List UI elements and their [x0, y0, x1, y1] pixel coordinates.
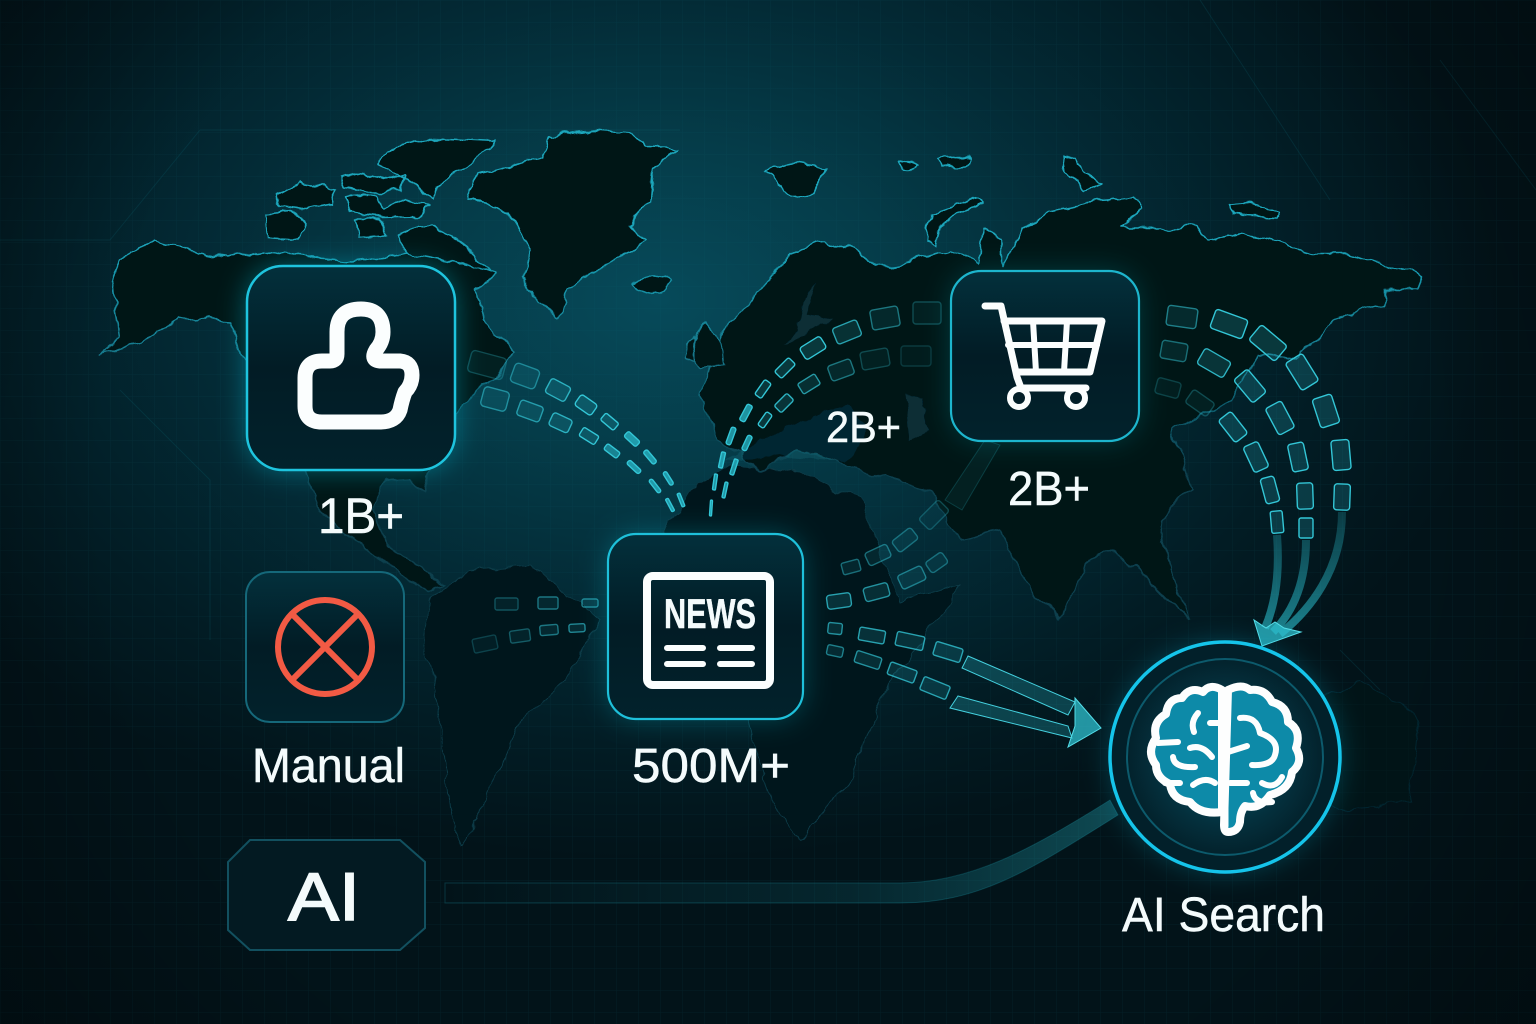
flow: news to South America — [472, 597, 598, 653]
flow: news to social card — [467, 350, 685, 512]
flow: news to Asia — [826, 440, 1000, 610]
icon: newspaper — [647, 576, 770, 685]
land: Baltic and Caspian — [785, 282, 930, 440]
land: Arctic islands — [266, 137, 495, 270]
label: 500M+: 500M+ — [632, 740, 790, 793]
icon: newspaper: NEWS — [664, 590, 756, 637]
land: Greenland — [468, 130, 677, 318]
world map — [100, 130, 1422, 845]
land: Eurasia — [700, 197, 1422, 620]
arrow: cart flow converging into AI search — [1254, 512, 1342, 646]
icon: red cross circle — [278, 600, 372, 694]
panel: AI badge — [228, 840, 425, 950]
land: Africa and Middle East — [640, 465, 960, 840]
label: 1B+: 1B+ — [318, 488, 404, 544]
label: 2B+ under cart: 2B+ — [1008, 463, 1090, 516]
icon: brain — [1151, 686, 1299, 832]
label: AI: AI — [288, 859, 360, 935]
land: Franz Josef and Arctic Russia islands — [898, 155, 1278, 218]
land: Svalbard — [766, 163, 825, 198]
panel: social card — [247, 266, 455, 470]
arrow: news to AI search — [826, 622, 1101, 747]
land: British Isles — [684, 320, 722, 368]
panel: manual card — [246, 572, 404, 722]
arrow: AI to AI search — [445, 800, 1118, 903]
panel: cart card — [951, 271, 1139, 441]
land: South America — [425, 565, 600, 845]
land: Australia — [1300, 680, 1420, 810]
flow: news to cart card — [709, 302, 941, 516]
label: 2B+ over map: 2B+ — [826, 403, 901, 452]
panel: news card — [608, 534, 803, 719]
land: North America — [100, 240, 515, 592]
land: Mediterranean glow — [725, 405, 868, 462]
label: AI Search: AI Search — [1122, 889, 1325, 942]
icon: shopping cart — [985, 306, 1102, 407]
land: Novaya Zemlya — [927, 197, 983, 245]
panel: AI search circle — [1110, 642, 1340, 872]
flow: cart to AI search — [1154, 305, 1351, 538]
label: Manual: Manual — [252, 740, 405, 793]
icon: thumbs up — [305, 309, 412, 422]
land: Iceland — [632, 276, 670, 294]
